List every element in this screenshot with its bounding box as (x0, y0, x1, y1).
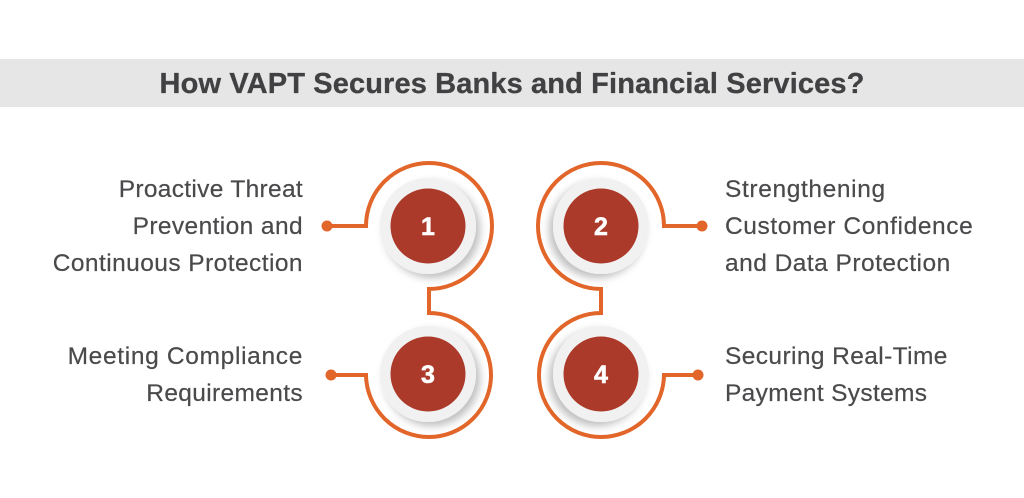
badge 2: 2 (594, 213, 608, 241)
text: item 2: Strengthening (725, 176, 886, 203)
title: How VAPT Secures Banks and Financial Services? (160, 68, 864, 100)
connector: orange lines right (538, 163, 702, 437)
text: item 1: Prevention and (133, 213, 303, 240)
text: item 3: Meeting Compliance (68, 343, 303, 370)
text: item 1: Continuous Protection (53, 250, 303, 277)
badge 3 (380, 326, 476, 422)
title band (0, 59, 1024, 107)
badge 2 (553, 178, 649, 274)
text: item 1: Proactive Threat (119, 176, 303, 203)
text: item 4 (725, 343, 948, 407)
badge 1: 1 (421, 213, 435, 241)
text: item 2: and Data Protection (725, 250, 951, 277)
text: item 4: Payment Systems (725, 380, 927, 407)
connector: orange lines left (327, 163, 492, 437)
text: item 2 (725, 176, 973, 277)
badge 4: 4 (594, 361, 608, 389)
badge 4 (553, 326, 649, 422)
text: item 4: Securing Real-Time (725, 343, 948, 370)
connector dots (322, 220, 708, 380)
text: item 1 (53, 176, 303, 277)
text: item 3: Requirements (146, 380, 303, 407)
badge 1 (380, 178, 476, 274)
badge 3: 3 (421, 361, 435, 389)
text: item 3 (68, 343, 303, 407)
text: item 2: Customer Confidence (725, 213, 973, 240)
